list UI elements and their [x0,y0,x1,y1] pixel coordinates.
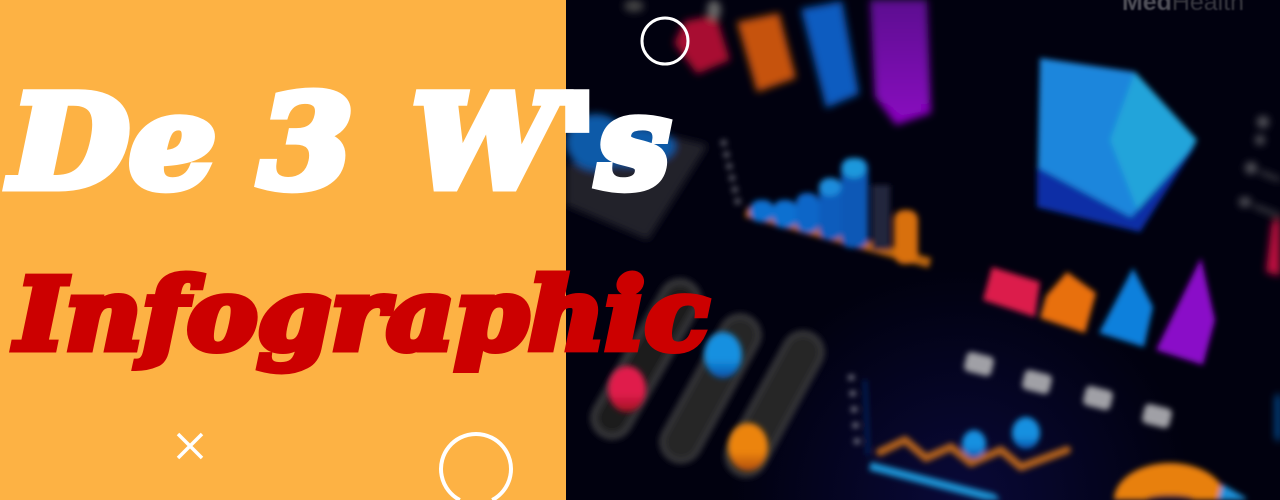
icon: cross [178,434,202,458]
icon: top ring [642,18,688,64]
heading: Infographic: Infographic [13,258,709,373]
heading: De 3 W's: De [8,68,216,218]
grey label dots [963,351,1173,429]
grey platform with blue disc [566,114,708,240]
slider knobs [608,332,768,471]
heading: De 3 W's [8,68,670,218]
line chart [851,375,1067,500]
panel: orange left block [0,0,566,500]
row of coloured shapes [983,258,1215,365]
heading: De 3 W's: 3 [259,68,353,218]
3D bar chart [723,140,930,264]
large blue polyhedron [1037,58,1197,232]
donut chart [1114,463,1246,500]
slider capsules [612,300,803,456]
panel: blurred dark dashboard background [566,0,1280,500]
top row of 3D blocks [624,0,931,125]
icon: bottom ring [441,434,511,500]
heading: De 3 W's: W's [412,68,670,218]
right-edge legend dots [1239,116,1280,442]
